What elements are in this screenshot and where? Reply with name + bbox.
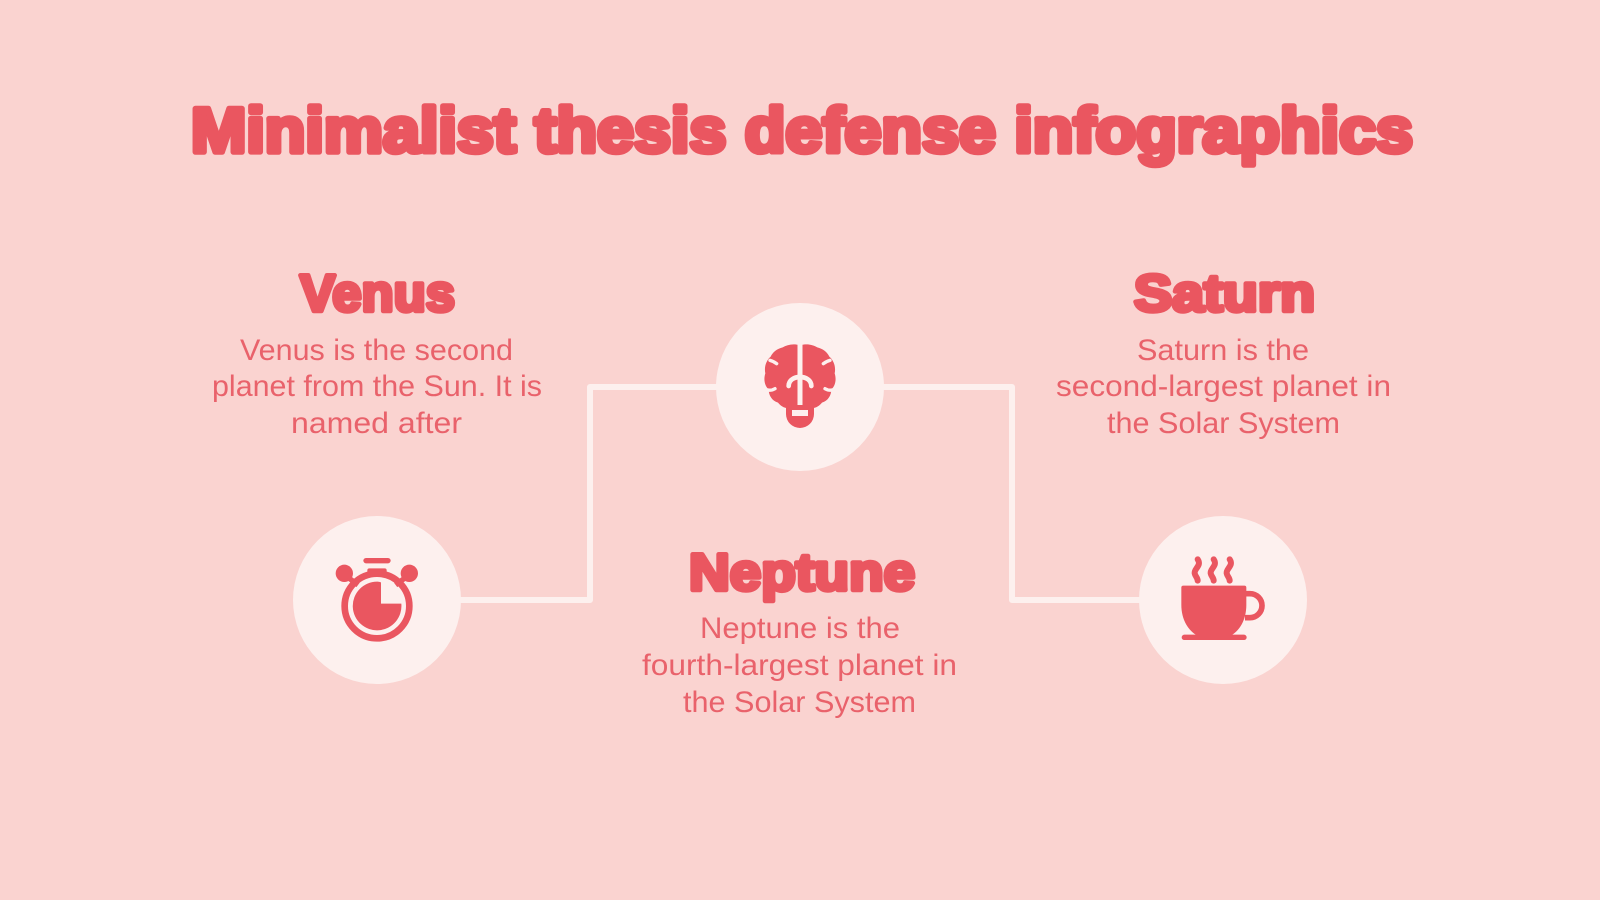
icon: steaming coffee cup in circle bbox=[1139, 516, 1307, 684]
description: Venus: Venus is the second bbox=[240, 334, 513, 367]
icon: stopwatch in circle bbox=[293, 516, 461, 684]
description: Saturn: second-largest planet in bbox=[1056, 370, 1391, 403]
panel: Saturn text bbox=[1056, 265, 1391, 440]
description: Neptune bbox=[642, 612, 957, 719]
description: Saturn: the Solar System bbox=[1107, 407, 1340, 440]
heading: Neptune: Neptune bbox=[689, 544, 915, 602]
description: Neptune: fourth-largest planet in bbox=[642, 649, 957, 682]
icon: brain light bulb in circle bbox=[716, 303, 884, 471]
connector: right bbox=[880, 387, 1145, 600]
heading: Saturn: Saturn bbox=[1134, 265, 1315, 323]
panel: Neptune text bbox=[642, 544, 957, 719]
description: Venus: named after bbox=[291, 407, 462, 440]
description: Saturn: Saturn is the bbox=[1137, 334, 1309, 367]
description: Venus bbox=[212, 334, 542, 440]
description: Saturn bbox=[1056, 334, 1391, 440]
description: Neptune: Neptune is the bbox=[700, 612, 900, 645]
heading: Venus: Venus bbox=[300, 265, 455, 323]
description: Neptune: the Solar System bbox=[683, 686, 916, 719]
description: Venus: planet from the Sun. It is bbox=[212, 370, 542, 403]
title: Minimalist thesis defense infographics bbox=[191, 96, 1413, 166]
panel: Venus text bbox=[212, 265, 542, 440]
connector: left bbox=[460, 387, 720, 600]
